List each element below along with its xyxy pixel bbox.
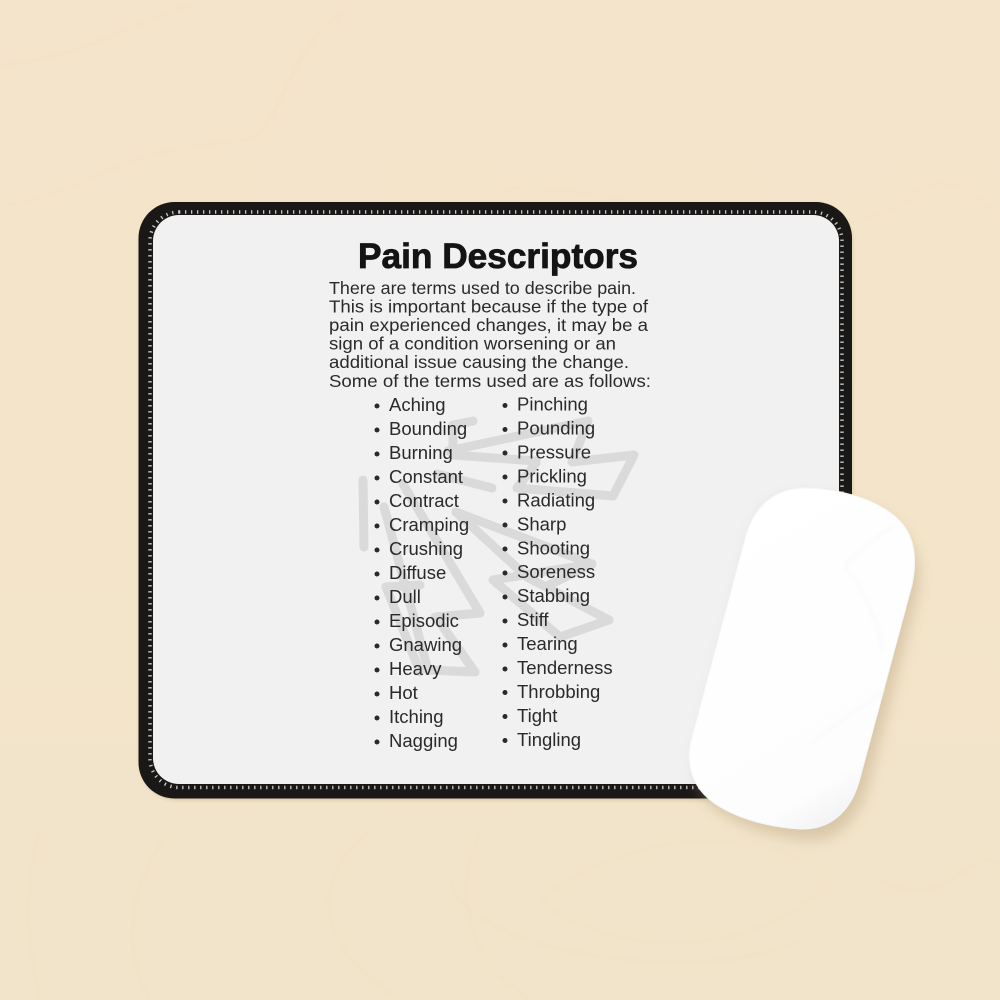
intro paragraph: Some of the terms used are as follows: xyxy=(329,371,651,391)
bullet list: first column: Bounding xyxy=(389,418,467,439)
intro paragraph: There are terms used to describe pain. xyxy=(329,278,636,298)
bullet list: second column: Stabbing xyxy=(517,585,590,606)
bullet list: first column: Episodic xyxy=(389,610,459,631)
bullet list: second column: Tight xyxy=(517,705,557,726)
mouse surface highlights xyxy=(810,525,895,745)
bullet list: second column: Radiating xyxy=(517,490,595,510)
bullet list: first column xyxy=(374,394,469,751)
intro paragraph xyxy=(329,278,651,391)
bullet list: first column: Burning xyxy=(389,442,453,463)
intro paragraph: additional issue causing the change. xyxy=(329,352,629,372)
bullet list: second column: Tenderness xyxy=(517,657,613,678)
bullet list: second column: Pressure xyxy=(517,442,591,462)
pad shadow xyxy=(140,204,852,800)
bullet list: first column: Aching xyxy=(389,394,446,415)
bullet list: first column: Nagging xyxy=(389,730,458,751)
mouse body xyxy=(689,488,915,829)
bullet list: first column: Cramping xyxy=(389,514,469,535)
bullet list: second column xyxy=(502,394,613,750)
bullet list: second column: Tingling xyxy=(517,729,581,750)
bullet list: second column: Sharp xyxy=(517,514,566,534)
bullet list: first column: Heavy xyxy=(389,658,442,679)
mouse pad xyxy=(138,202,852,800)
title: Pain Descriptors xyxy=(358,237,638,276)
bullet list: second column: Stiff xyxy=(517,609,549,630)
bullet list: second column: Throbbing xyxy=(517,681,600,702)
bullet list: first column: Diffuse xyxy=(389,562,446,583)
bullet list: second column: Soreness xyxy=(517,561,595,582)
bullet list: first column: Hot xyxy=(389,682,418,703)
bullet list: first column: Dull xyxy=(389,586,421,607)
intro paragraph: pain experienced changes, it may be a xyxy=(329,315,648,335)
faded arrows watermark xyxy=(363,421,634,672)
pad white surface xyxy=(153,215,839,784)
border stitching xyxy=(150,212,842,788)
intro paragraph: This is important because if the type of xyxy=(329,296,648,316)
intro paragraph: sign of a condition worsening or an xyxy=(329,334,616,354)
bullet list: second column: Pounding xyxy=(517,418,595,438)
bullet list: second column: Prickling xyxy=(517,466,587,486)
computer mouse xyxy=(689,488,919,840)
bullet list: first column: Constant xyxy=(389,466,463,487)
bullet list: second column: Shooting xyxy=(517,538,590,558)
bullet list: first column: Crushing xyxy=(389,538,463,559)
bullet list: first column: Contract xyxy=(389,490,459,511)
bullet list: second column: Tearing xyxy=(517,633,578,654)
pad black stitched border xyxy=(138,202,852,798)
mouse shadow xyxy=(696,496,919,840)
bullet list: second column: Pinching xyxy=(517,394,588,414)
bullet list: first column: Itching xyxy=(389,706,444,727)
bullet list: first column: Gnawing xyxy=(389,634,462,655)
